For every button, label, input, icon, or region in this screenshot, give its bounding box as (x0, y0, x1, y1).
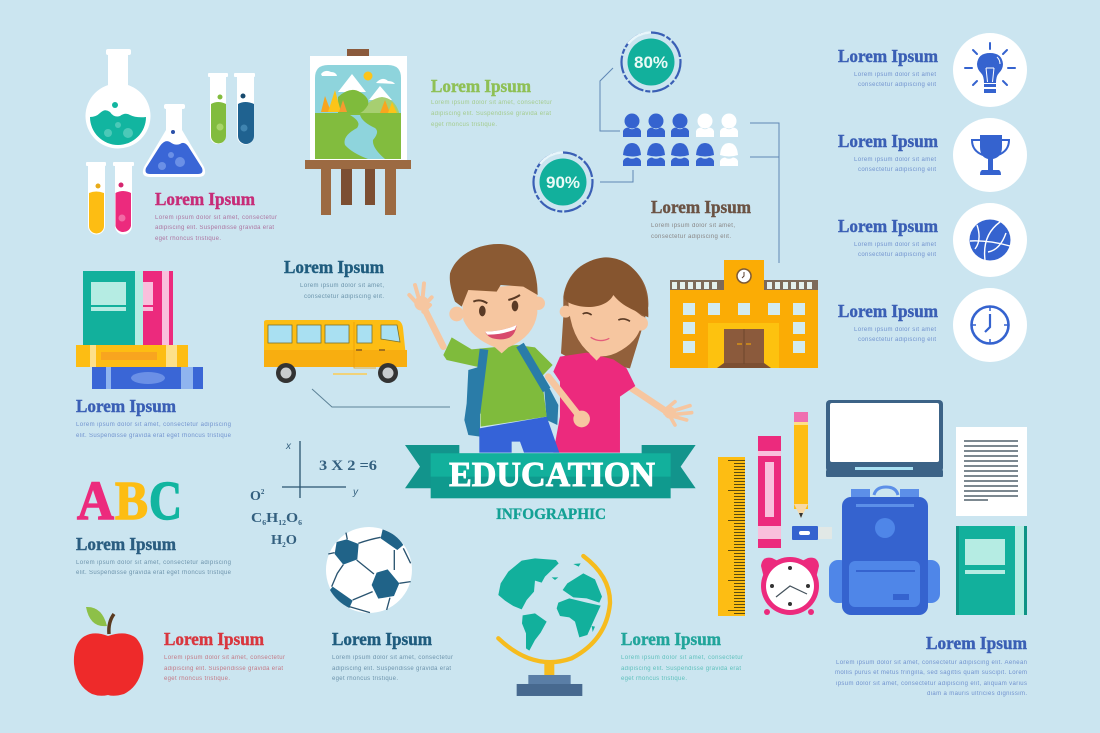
text: supplies: diam a mauris ultricies dignissim. (927, 691, 1027, 697)
ABC letters (77, 470, 182, 531)
math formulas: 6 (262, 519, 267, 527)
text: art: Lorem Ipsum (431, 76, 531, 96)
text: supplies: Lorem Ipsum (926, 633, 1027, 653)
text: transport (284, 257, 384, 300)
illustration: two children (409, 244, 692, 453)
text: chemistry: Lorem Ipsum (155, 189, 255, 209)
text: alphabet (76, 534, 232, 576)
item: basketball: Lorem Ipsum (838, 216, 938, 236)
icon: yellow test tube (86, 162, 106, 234)
item: trophy: Lorem ipsum dolor sit amet (854, 157, 936, 163)
text: school (651, 197, 751, 240)
right icon list (838, 33, 1027, 362)
text: sport: adipiscing elit. Suspendisse gravida erat (332, 666, 451, 672)
text: books: Lorem Ipsum (76, 396, 176, 416)
text: alphabet: Lorem Ipsum (76, 534, 176, 554)
icon: school bus (264, 320, 407, 383)
text: school: Lorem ipsum dolor sit amet, (651, 223, 735, 229)
text: art (431, 76, 552, 128)
text: chemistry (155, 189, 277, 242)
item: clock: consectetur adipiscing elit (858, 337, 936, 343)
math formulas: 2 (282, 541, 286, 549)
icon: soccer ball (326, 527, 412, 613)
item: trophy (838, 118, 1027, 192)
text: alphabet: elit. Suspendisse gravida erat eget rhoncus tristique (76, 570, 232, 576)
text: supplies (835, 633, 1027, 697)
text: supplies: ipsum dolor sit amet, consectetur adipiscing elit, aliquam varius (836, 681, 1027, 687)
text: books: Lorem ipsum dolor sit amet, consectetur adipiscing (76, 422, 231, 428)
item: clock (838, 288, 1027, 362)
text: apple: eget rhoncus tristique. (164, 676, 230, 682)
icon: green test tube (208, 73, 228, 144)
text: chemistry: adipiscing elit. Suspendisse gravida erat (155, 225, 274, 231)
math formulas: H (266, 511, 278, 526)
math formulas: O (286, 533, 297, 548)
subtitle: INFOGRAPHIC (496, 506, 606, 523)
text: chemistry: Lorem ipsum dolor sit amet, consectetur (155, 215, 277, 221)
icon: pink test tube (113, 162, 134, 234)
stat: 90 percent: 90% (546, 173, 580, 192)
math formulas: O (286, 511, 298, 526)
ABC letters: A (77, 470, 114, 531)
math formulas: H (271, 533, 282, 548)
math formulas: 3 X 2 =6 (319, 458, 378, 474)
text: art: Lorem ipsum dolor sit amet, consectetur (431, 100, 552, 106)
text: supplies: mollis purus et metus fringilla, sed sagittis quam suscipit. Lorem (835, 670, 1027, 676)
text: geography: Lorem Ipsum (621, 629, 721, 649)
stat: 90 percent (534, 152, 592, 212)
math formulas: 2 (261, 488, 265, 496)
text: sport (332, 629, 453, 682)
math formulas: 6 (298, 519, 303, 527)
stat: 80 percent (622, 32, 680, 92)
text: school: Lorem Ipsum (651, 197, 751, 217)
text: sport: Lorem Ipsum (332, 629, 432, 649)
item: idea: Lorem Ipsum (838, 46, 938, 66)
text: art: adipiscing elit. Suspendisse gravida erat (431, 111, 551, 117)
item: clock: Lorem ipsum dolor sit amet (854, 327, 936, 333)
banner: education title: EDUCATION (449, 455, 655, 494)
math formulas: O (250, 489, 261, 504)
connector line: bus (312, 389, 450, 407)
text: chemistry: eget rhoncus tristique. (155, 236, 221, 242)
icon: easel with painting (305, 49, 411, 215)
text: sport: Lorem ipsum dolor sit amet, consectetur (332, 655, 453, 661)
icon: backpack (829, 487, 940, 615)
item: basketball: consectetur adipiscing elit (858, 252, 936, 258)
item: idea (838, 33, 1027, 107)
text: apple: Lorem ipsum dolor sit amet, consectetur (164, 655, 285, 661)
stat: 80 percent: 80% (634, 53, 668, 72)
icon: globe (498, 556, 610, 696)
icon: pencil (794, 412, 808, 518)
ABC letters: C (149, 470, 182, 531)
ABC letters: B (115, 470, 148, 531)
item: basketball: Lorem ipsum dolor sit amet (854, 242, 936, 248)
math formulas: y (352, 487, 359, 498)
text: geography: Lorem ipsum dolor sit amet, consectetur (621, 655, 743, 661)
text: supplies: Lorem ipsum dolor sit amet, consectetur adipiscing elit. Aenean (836, 660, 1027, 666)
text: books (76, 396, 232, 439)
icon: alarm clock (761, 557, 819, 615)
math formulas: 12 (278, 519, 287, 527)
banner: education title (405, 445, 696, 498)
icon: conical flask (143, 104, 205, 177)
icon: laptop (826, 400, 943, 477)
icon: marker (758, 436, 781, 548)
math formulas: C (251, 511, 261, 526)
item: clock: Lorem Ipsum (838, 301, 938, 321)
math formulas (250, 441, 378, 549)
text: transport: consectetur adipiscing elit. (304, 294, 384, 300)
icon: round flask (86, 49, 150, 148)
icon: apple (74, 607, 143, 696)
icon: sharpener (792, 526, 832, 540)
item: trophy: consectetur adipiscing elit (858, 167, 936, 173)
text: geography (621, 629, 743, 682)
text: geography: adipiscing elit. Suspendisse gravida erat (621, 666, 741, 672)
connector lines: percentages (600, 68, 779, 263)
icon: ruler (718, 457, 745, 616)
text: art: eget rhoncus tristique. (431, 122, 497, 128)
item: trophy: Lorem Ipsum (838, 131, 938, 151)
item: basketball (838, 203, 1027, 277)
text: apple (164, 629, 285, 682)
item: idea: consectetur adipiscing elit (858, 82, 936, 88)
icon: school building (670, 260, 818, 368)
text: alphabet: Lorem ipsum dolor sit amet, consectetur adipiscing (76, 560, 231, 566)
boy (409, 244, 590, 453)
text: apple: adipiscing elit. Suspendisse gravida erat (164, 666, 283, 672)
item: idea: Lorem ipsum dolor sit amet (854, 72, 936, 78)
girl (553, 257, 692, 453)
math formulas: x (285, 441, 292, 452)
text: apple: Lorem Ipsum (164, 629, 264, 649)
icon: green book (956, 526, 1027, 615)
text: transport: Lorem ipsum dolor sit amet, (300, 283, 384, 289)
text: transport: Lorem Ipsum (284, 257, 384, 277)
icon: navy test tube (234, 73, 255, 144)
icon group: people (623, 114, 738, 166)
text: geography: eget rhoncus tristique. (621, 676, 687, 682)
text: school: consectetur adipiscing elit. (651, 234, 731, 240)
icon: stack of books (76, 271, 203, 389)
text: books: elit. Suspendisse gravida erat eget rhoncus tristique (76, 433, 232, 439)
icon: paper sheet (956, 427, 1027, 516)
text: sport: eget rhoncus tristique. (332, 676, 398, 682)
